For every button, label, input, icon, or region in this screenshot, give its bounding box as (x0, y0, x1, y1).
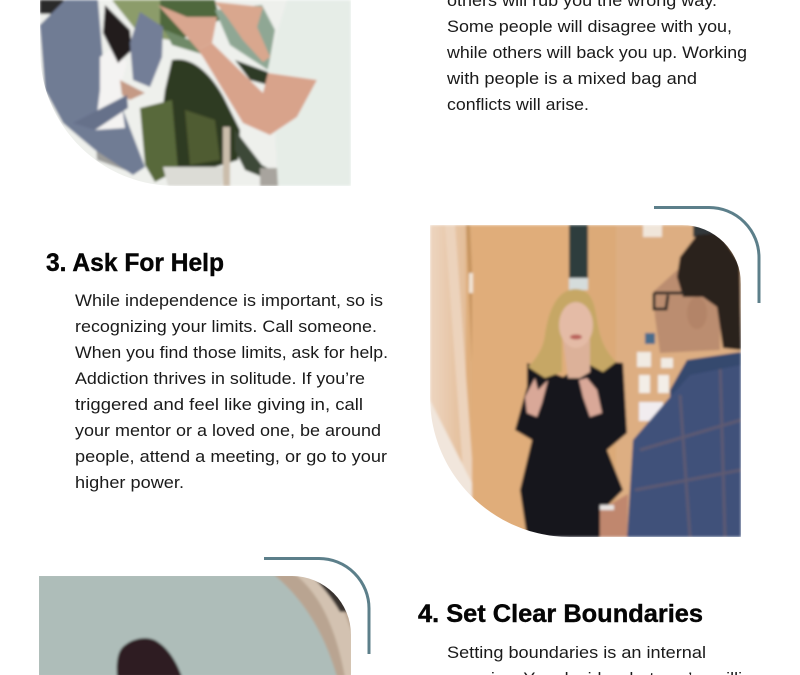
heading: 3. Ask For Help: 3. Ask For Help (46, 249, 224, 277)
text block: item 2 description: while others will back you up. Working (446, 44, 747, 62)
text block: item 3 description: When you find those limits, ask for help. (75, 344, 388, 362)
photo: woman in black blazer talking to a man (430, 225, 741, 537)
text block: item 2 description: conflicts will arise. (447, 96, 589, 114)
accent arc: item 3 photo (654, 208, 759, 303)
woman (40, 0, 64, 14)
text block: item 2 description (446, 0, 747, 114)
text block: item 3 description: higher power. (75, 474, 184, 492)
text block: item 3 description: While independence is important, so is (75, 292, 383, 310)
photo: two people arguing beside a plant (40, 0, 351, 186)
accent arc: item 4 photo (264, 558, 369, 654)
text block: item 3 description: your mentor or a loved one, be around (75, 422, 381, 440)
central plant foliage (160, 59, 240, 167)
background leaves (112, 0, 170, 40)
text block: item 3 description: recognizing your limits. Call someone. (75, 318, 377, 336)
text block: item 2 description: with people is a mixed bag and (446, 70, 697, 88)
text block: item 3 description (75, 292, 388, 492)
text block: item 4 description (447, 644, 762, 675)
pot and stem (163, 167, 224, 186)
man (158, 5, 217, 50)
woman (515, 360, 627, 537)
heading: 4. Set Clear Boundaries: 4. Set Clear Boundaries (418, 600, 703, 628)
text block: item 3 description: Addiction thrives in solitude. If you’re (75, 370, 365, 388)
photo: woman looking into a round mirror (37, 574, 353, 675)
text block: item 2 description: Some people will disagree with you, (447, 18, 732, 36)
man (627, 352, 741, 537)
text block: item 3 description: people, attend a meeting, or go to your (75, 448, 388, 466)
text block: item 3 description: triggered and feel like giving in, call (75, 396, 363, 414)
text block: item 4 description: Setting boundaries is an internal (447, 644, 706, 662)
